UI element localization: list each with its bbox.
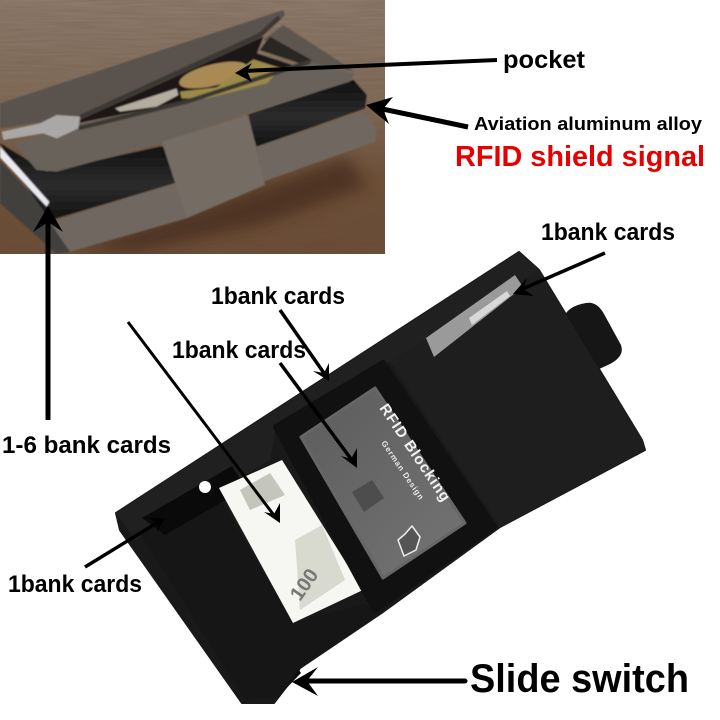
photo: open wallet: [116, 252, 645, 703]
arrow: 1-6 bank cards vertical: [33, 206, 63, 420]
table shadow: [77, 157, 367, 252]
RFID blocking card: [301, 388, 465, 578]
label: RFID shield signal: RFID shield signal: [455, 141, 705, 173]
arrow: aviation aluminum alloy: [366, 97, 468, 127]
lower wallet body, right: [257, 112, 377, 182]
wooden table background: [0, 0, 385, 254]
arrow: window card: [280, 363, 357, 468]
zip pocket front: [0, 10, 285, 128]
card chip mark: [352, 480, 384, 512]
label: aviation aluminum alloy: Aviation aluminum alloy: [474, 114, 702, 134]
small card, top right: [426, 275, 523, 357]
label: 1-6 bank cards: 1-6 bank cards: [2, 432, 171, 459]
arrow: lower left card: [85, 518, 165, 567]
card title: RFID Blocking: [376, 401, 454, 505]
label: rear slot bank cards: 1bank cards: [211, 283, 345, 310]
top leather band: [116, 252, 539, 540]
lower wallet body, left: [50, 182, 187, 252]
black card with hole: [142, 466, 246, 535]
banknote: [219, 460, 363, 623]
card subtitle: German Design: [379, 439, 425, 501]
zipper teeth: [80, 17, 279, 117]
zipper pull: [2, 115, 80, 140]
card shield icon: [398, 526, 420, 556]
arrow: slide switch: [292, 667, 465, 696]
right leather panel: [390, 270, 645, 527]
silver coin: [115, 88, 178, 112]
left leather pocket: [141, 490, 383, 700]
main flap: [13, 63, 355, 172]
photo: closed wallet on wooden table: [0, 0, 385, 254]
label: pocket: pocket: [503, 46, 586, 74]
pocket opening: [80, 37, 297, 123]
ID window frame: [276, 363, 494, 610]
label: slide switch: Slide switch: [470, 657, 689, 701]
slide tab: [266, 667, 301, 697]
wallet in photo: [0, 10, 377, 254]
wallet body: [116, 252, 645, 703]
label: lower left bank cards: 1bank cards: [8, 571, 142, 598]
arrow: pocket: [235, 60, 497, 82]
silver case edge: [0, 147, 49, 207]
black aluminium case, right: [247, 80, 367, 147]
banknote value: 100: [286, 565, 323, 605]
left spine: [0, 160, 70, 254]
brass key: [180, 59, 282, 98]
arrow: top right card: [513, 253, 605, 296]
gold coin: [178, 60, 246, 90]
black aluminium case, left: [0, 143, 180, 220]
closure strap: [564, 303, 622, 370]
rear interior: [263, 25, 355, 72]
arrow: rear slot: [280, 310, 329, 381]
label: top right bank cards: 1bank cards: [541, 219, 675, 246]
label: window bank cards: 1bank cards: [172, 337, 306, 364]
arrow: banknote slot: [128, 322, 280, 523]
closure strap: [162, 115, 265, 218]
